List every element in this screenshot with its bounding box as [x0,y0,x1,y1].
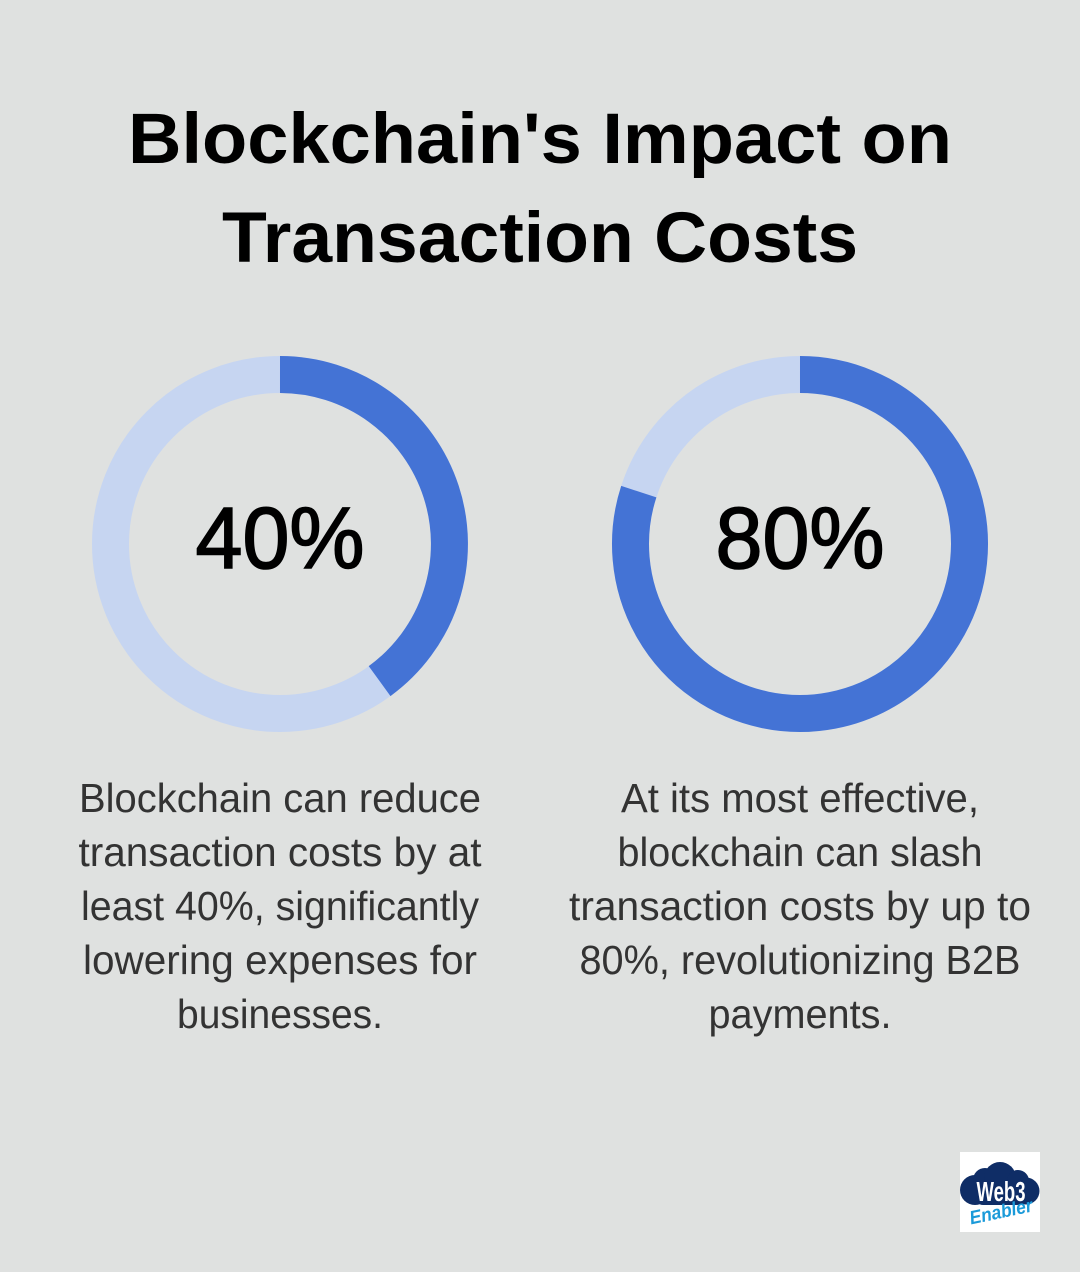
icon: cloud [960,1162,1040,1205]
description: 40%: lowering expenses for [83,937,477,983]
donut chart: 80% [630,374,970,714]
description: 40%: least 40%, significantly [81,883,479,929]
description: 80%: blockchain can slash [618,829,982,875]
wordmark: Web3: Web3 [976,1176,1026,1207]
description: 80%: transaction costs by up to [569,883,1031,929]
description: 80%: 80%, revolutionizing B2B [580,937,1020,983]
donut chart: 40% [110,374,450,714]
description: 40%: Blockchain can reduce [79,775,481,821]
description: 80%: payments. [708,991,892,1037]
value: 40%: 40% [196,490,364,587]
value: 80%: 80% [716,490,884,587]
title [128,100,952,278]
title: Transaction Costs [222,199,858,278]
description: 40%: transaction costs by at [78,829,482,875]
description: 80%: At its most effective, [621,775,979,821]
description: 80% [569,775,1031,1037]
description: 40%: businesses. [177,991,383,1037]
logo: Web3 Enabler [960,1152,1040,1232]
panel: 80% stat [569,374,1031,1037]
description: 40% [78,775,482,1037]
panel: 40% stat [78,374,482,1037]
title: Blockchain's Impact on [128,100,952,179]
wordmark: Enabler: Enabler [968,1195,1036,1229]
